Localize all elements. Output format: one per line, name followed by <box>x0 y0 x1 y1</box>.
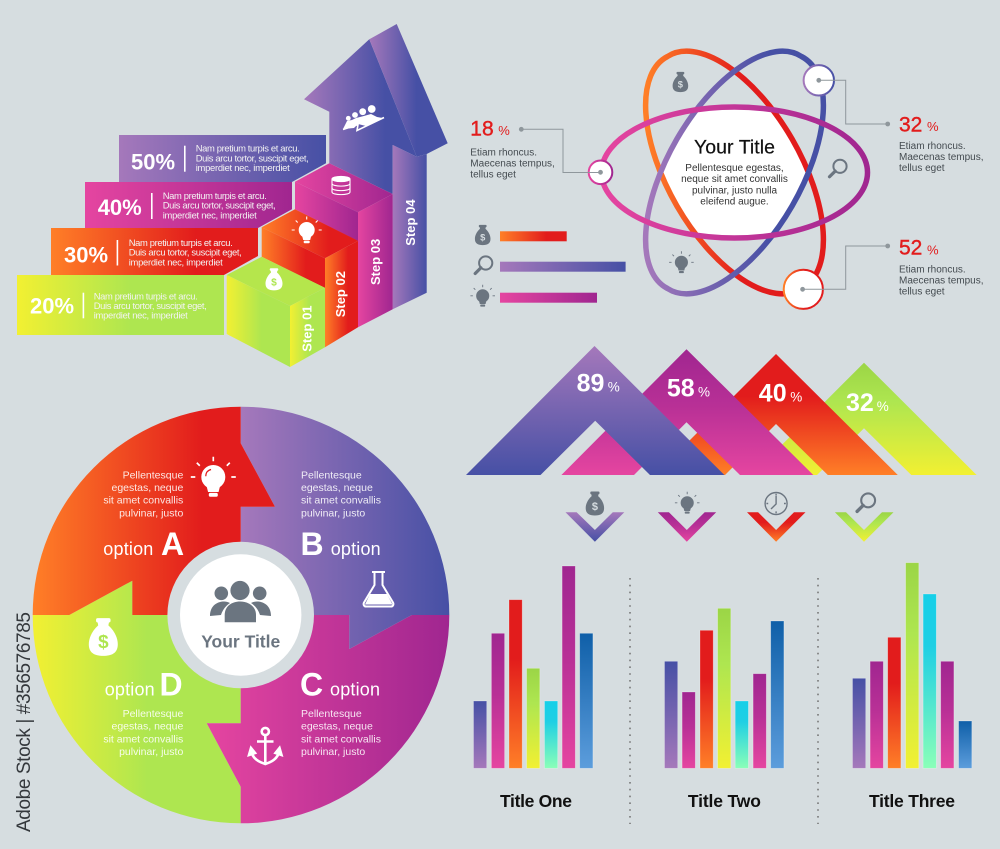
text block: centre: eleifend augue. <box>700 196 769 207</box>
option B: egestas, neque <box>301 482 373 494</box>
icon: people <box>210 581 271 622</box>
stat: 18%: % <box>498 123 510 138</box>
bar chart: Title One <box>474 566 593 768</box>
chevron icon: bulb <box>658 492 716 542</box>
banner: 50% <box>119 135 326 182</box>
option A: A <box>161 526 184 562</box>
option D: egestas, neque <box>111 721 183 733</box>
chevron icon: money <box>566 492 624 542</box>
icon: search <box>830 160 847 177</box>
leader: 32% <box>816 78 890 126</box>
chevron icon: money: $ <box>592 501 598 513</box>
bar chart: Title Two <box>664 608 784 768</box>
mountain: 89% <box>466 346 724 475</box>
banner: 40%: 40% <box>98 195 142 220</box>
step 03 block: Step 03 <box>368 239 383 285</box>
option B: pulvinar, justo <box>301 507 365 519</box>
banner: 20%: Nam pretium turpis et arcu. <box>94 290 198 301</box>
option C: egestas, neque <box>301 721 373 733</box>
option D <box>103 667 183 758</box>
panel: four option circle <box>33 407 449 823</box>
icon: money bag: $ <box>98 631 109 652</box>
legend row: bulb <box>470 285 597 307</box>
icon: money bag <box>673 72 688 92</box>
banner: 20%: 20% <box>30 293 74 318</box>
text block: centre: pulvinar, justo nulla <box>692 185 777 196</box>
orbit node: 18% <box>589 160 612 184</box>
bar chart: Title Three <box>852 563 972 768</box>
stat: 32%: Maecenas tempus, <box>899 152 984 163</box>
option B: option <box>331 539 381 559</box>
orbit node: 52% <box>784 270 823 309</box>
mountain: 32% <box>752 363 977 475</box>
option A: pulvinar, justo <box>119 507 183 519</box>
banner: 40%: imperdiet nec, imperdiet <box>163 209 257 220</box>
chart title: Title One: Title One <box>500 791 572 811</box>
panel: staircase arrow infographic <box>17 24 448 367</box>
stat: 32% <box>899 113 984 174</box>
panel: atom diagram <box>470 40 984 310</box>
banner: 50%: Duis arcu tortor, suscipit eget, <box>196 152 309 163</box>
stat: 52%: Etiam rhoncus. <box>899 264 966 275</box>
icon: money bag: $ <box>271 277 277 288</box>
banner: 20%: Duis arcu tortor, suscipit eget, <box>94 300 207 311</box>
mountain: 58% <box>561 349 813 475</box>
step 02 block: Step 02 <box>333 271 348 317</box>
orbit node: 32% <box>804 65 834 96</box>
panel: bar charts <box>474 563 972 824</box>
banner: 30%: 30% <box>64 242 108 267</box>
icon: team with arrow <box>343 105 384 130</box>
orbit: pink to purple <box>602 107 868 238</box>
stat: 32%: 32 <box>899 113 922 136</box>
option A: Pellentesque <box>123 469 183 481</box>
stat: 52%: % <box>927 242 939 257</box>
panel: overlapping mountains <box>466 346 977 542</box>
option B <box>300 469 381 562</box>
stat: 18%: Etiam rhoncus. <box>470 147 537 158</box>
stat: 32%: % <box>927 119 939 134</box>
banner: 30%: Nam pretium turpis et arcu. <box>129 237 233 248</box>
option B: B <box>300 526 324 562</box>
banner: 20%: imperdiet nec, imperdiet <box>94 310 188 321</box>
stat: 18% <box>470 117 555 180</box>
option D: pulvinar, justo <box>119 746 183 758</box>
banner: 30% <box>51 228 258 275</box>
title: Your Title <box>694 136 775 158</box>
hub title: Your Title <box>201 631 280 651</box>
icon: light bulb <box>292 216 322 243</box>
text block: centre: Pellentesque egestas, <box>685 163 784 174</box>
banner: 40% <box>85 182 292 228</box>
stat: 52%: Maecenas tempus, <box>899 275 984 286</box>
icon: bulb <box>191 457 236 497</box>
option C: option <box>330 680 380 700</box>
icon: money bag <box>89 618 118 656</box>
stat: 52%: tellus eget <box>899 286 945 297</box>
option A <box>103 469 184 562</box>
chevron icon: search <box>835 493 894 542</box>
mountain: 89%: % <box>608 380 620 395</box>
mountain: 40% <box>655 354 898 475</box>
mountain: 32%: 32 <box>846 389 874 417</box>
stat: 52%: 52 <box>899 237 922 260</box>
option D: option <box>105 680 155 700</box>
segment C <box>207 615 449 823</box>
leader: 52% <box>800 244 890 292</box>
orbit: purple to blue <box>646 51 823 294</box>
option A: sit amet convallis <box>103 495 183 507</box>
banner: 50%: imperdiet nec, imperdiet <box>196 162 290 173</box>
mountain: 40%: % <box>790 390 802 405</box>
option D: sit amet convallis <box>103 733 183 745</box>
mountain: 58%: % <box>698 385 710 400</box>
option B: Pellentesque <box>301 469 362 481</box>
step 02 block <box>262 209 358 347</box>
option C: C <box>300 667 323 703</box>
banner: 30%: Duis arcu tortor, suscipit eget, <box>129 247 242 258</box>
stat: 18%: tellus eget <box>470 169 516 180</box>
step 03 block <box>295 163 393 327</box>
chevron icon: clock <box>747 492 806 542</box>
banner: 30%: imperdiet nec, imperdiet <box>129 256 223 267</box>
icon: money bag: $ <box>678 79 684 89</box>
option C: Pellentesque <box>301 708 362 720</box>
stat: 32%: Etiam rhoncus. <box>899 141 966 152</box>
mountain: 40%: 40 <box>759 380 787 408</box>
step 04 arrow: Step 04 <box>403 199 418 246</box>
option D: Pellentesque <box>123 708 183 720</box>
mountain: 58%: 58 <box>667 375 695 403</box>
stat: 32%: tellus eget <box>899 163 945 174</box>
segment A <box>33 407 275 615</box>
icon: database <box>332 176 350 195</box>
stat: 18%: Maecenas tempus, <box>470 158 555 169</box>
text block: centre: neque sit amet convallis <box>681 174 788 185</box>
orbit: orange to red <box>646 51 823 294</box>
banner: 50%: Nam pretium turpis et arcu. <box>196 143 300 154</box>
option A: egestas, neque <box>111 482 183 494</box>
leader: 18% <box>519 127 603 175</box>
central white area <box>664 110 806 236</box>
banner: 40%: Duis arcu tortor, suscipit eget, <box>163 200 276 211</box>
centre hub <box>167 542 314 688</box>
option C <box>300 667 381 758</box>
icon: flask <box>364 572 393 606</box>
option C: pulvinar, justo <box>301 746 365 758</box>
legend row: money <box>475 225 567 245</box>
chart title: Title Three: Title Three <box>869 791 955 811</box>
legend row: money: $ <box>480 232 486 242</box>
icon: bulb <box>669 251 694 273</box>
chart title: Title Two: Title Two <box>688 791 761 811</box>
stat: 18%: 18 <box>470 117 494 140</box>
option A: option <box>103 539 153 559</box>
segment B <box>241 407 449 649</box>
option C: sit amet convallis <box>301 733 381 745</box>
step 01 block: Step 01 <box>300 305 315 352</box>
banner: 50%: 50% <box>131 149 175 174</box>
stat: 52% <box>899 237 984 297</box>
text block: centre <box>681 163 788 207</box>
legend row: search <box>475 256 626 274</box>
mountain: 89%: 89 <box>577 370 604 398</box>
option B: sit amet convallis <box>301 495 381 507</box>
step 04 arrow <box>304 24 448 309</box>
side credit: Adobe Stock | #356576785 <box>14 612 35 832</box>
mountain: 32%: % <box>877 399 889 414</box>
icon: money bag <box>266 268 282 290</box>
banner: 20% <box>17 275 224 335</box>
icon: anchor <box>249 728 282 764</box>
segment D <box>33 581 241 823</box>
banner: 40%: Nam pretium turpis et arcu. <box>163 190 267 201</box>
option D: D <box>160 667 183 703</box>
step 01 block <box>227 257 325 367</box>
